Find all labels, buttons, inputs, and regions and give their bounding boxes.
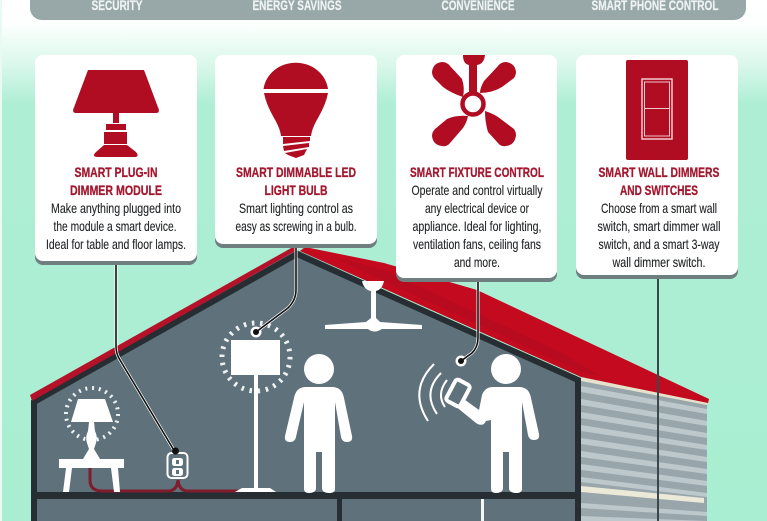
lamp shade — [71, 399, 113, 422]
base — [235, 488, 276, 492]
signal waves — [419, 364, 447, 421]
card text: Operate and control virtually — [412, 182, 542, 198]
card text — [236, 200, 356, 234]
small table lamp — [59, 388, 124, 492]
card text — [598, 200, 720, 270]
wall outline — [34, 254, 578, 521]
leader line: LED bulb — [250, 246, 296, 338]
card text: switch, and a smart 3-way — [598, 236, 720, 252]
icon: table lamp — [73, 70, 159, 157]
card: smart plug-in dimmer module — [35, 55, 197, 265]
card title: LIGHT BULB — [264, 182, 328, 198]
card title: AND SWITCHES — [620, 182, 698, 198]
red power wires — [90, 468, 238, 491]
person standing — [285, 354, 352, 493]
card: smart dimmable LED light bulb — [215, 55, 377, 248]
header bar — [30, 0, 746, 20]
card text: Make anything plugged into — [51, 200, 181, 216]
card title — [70, 164, 162, 198]
shade — [231, 340, 280, 375]
wall outlet — [168, 453, 188, 478]
card title: SMART WALL DIMMERS — [598, 164, 720, 180]
leader line: plug-in module — [116, 262, 179, 454]
card title: SMART DIMMABLE LED — [236, 164, 356, 180]
ceiling fan — [325, 281, 422, 332]
floor lamp — [222, 323, 290, 492]
card: smart wall dimmers and switches — [576, 55, 738, 279]
card text: the module a smart device. — [54, 218, 176, 234]
card text: Smart lighting control as — [239, 200, 353, 216]
card text: appliance. Ideal for lighting, — [412, 218, 542, 234]
icon: wall switch — [626, 60, 688, 160]
roof left — [30, 247, 297, 401]
card: smart fixture control — [396, 55, 557, 282]
card title — [598, 164, 720, 198]
card text: and more. — [454, 254, 500, 270]
icon: light bulb — [264, 63, 328, 158]
card text: any electrical device or — [425, 200, 529, 216]
lower partition wall — [337, 499, 342, 521]
lamp base — [83, 422, 100, 459]
card text: Choose from a smart wall — [601, 200, 717, 216]
interior walls — [31, 250, 581, 521]
siding wall — [581, 376, 707, 521]
glow dashes — [66, 388, 118, 440]
leader line: wall dimmers — [657, 278, 659, 521]
card title: SMART FIXTURE CONTROL — [410, 164, 544, 180]
card text: ventilation fans, ceiling fans — [413, 236, 541, 252]
floor — [31, 492, 581, 499]
leader line: fixture control — [456, 281, 478, 366]
pole — [254, 375, 258, 490]
table — [59, 459, 124, 492]
card title: DIMMER MODULE — [70, 182, 162, 198]
card text: Ideal for table and floor lamps. — [46, 236, 186, 252]
phone — [445, 379, 471, 407]
lower white line — [481, 499, 484, 521]
card text — [412, 182, 542, 270]
card title — [236, 164, 356, 198]
card text: easy as screwing in a bulb. — [236, 218, 356, 234]
card text: switch, smart dimmer wall — [598, 218, 720, 234]
card text: wall dimmer switch. — [612, 254, 706, 270]
house cross-section — [30, 247, 709, 521]
card title: SMART PLUG-IN — [74, 164, 158, 180]
icon: ceiling fan — [432, 55, 516, 146]
glow dashes — [222, 323, 290, 391]
roof right — [300, 247, 709, 403]
card text — [46, 200, 186, 252]
person with phone — [419, 354, 539, 493]
